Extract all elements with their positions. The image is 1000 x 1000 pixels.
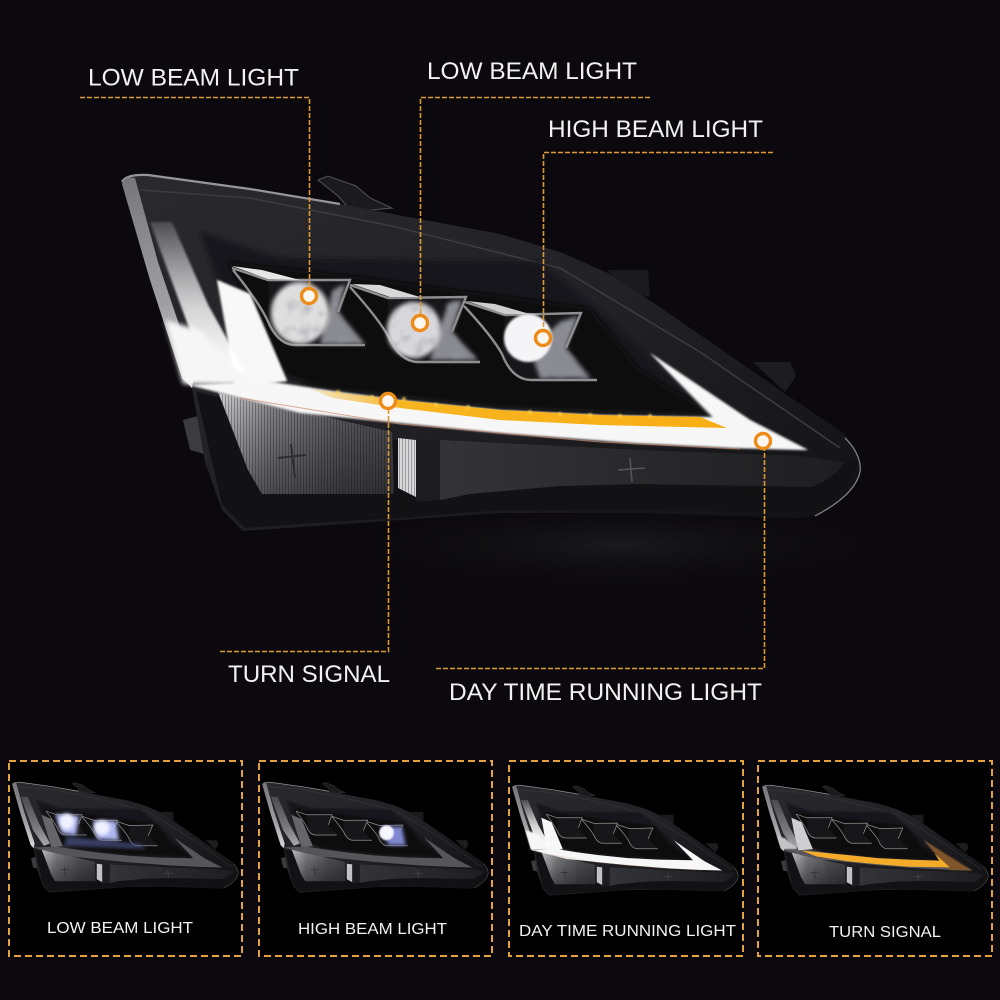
small headlight with low beam on bbox=[12, 782, 238, 893]
label: HIGH BEAM LIGHT bbox=[298, 921, 447, 938]
small headlight with running light on bbox=[512, 785, 738, 896]
small headlight with turn signal on bbox=[762, 785, 988, 896]
label: TURN SIGNAL bbox=[829, 924, 941, 941]
callout: high beam light: HIGH BEAM LIGHT bbox=[548, 116, 763, 143]
panel: turn signal bbox=[758, 761, 992, 956]
lit projector lenses bbox=[232, 266, 590, 378]
callout: high beam light bbox=[536, 116, 773, 346]
label: DAY TIME RUNNING LIGHT bbox=[519, 923, 736, 940]
panel: day time running light bbox=[509, 761, 743, 956]
callout: low beam light, middle projector bbox=[412, 58, 650, 330]
callout: turn signal bbox=[220, 394, 396, 688]
panel: low beam light bbox=[9, 761, 242, 956]
main headlight product illustration bbox=[122, 174, 880, 587]
panel: high beam light bbox=[259, 761, 492, 956]
headlight body bbox=[122, 174, 860, 531]
amber turn signal strip bbox=[310, 389, 727, 428]
label: LOW BEAM LIGHT bbox=[47, 920, 193, 937]
callout: low beam light, left projector bbox=[80, 64, 316, 304]
callout: low beam light, left projector: LOW BEAM LIGHT bbox=[88, 64, 299, 92]
callout: turn signal: TURN SIGNAL bbox=[228, 661, 390, 688]
callout: low beam light, middle projector: LOW BEAM LIGHT bbox=[427, 58, 637, 85]
headlight reflection on floor bbox=[360, 503, 880, 587]
callout: day time running light: DAY TIME RUNNING LIGHT bbox=[449, 679, 762, 706]
callout: day time running light bbox=[436, 434, 770, 706]
white daytime running light strip bbox=[150, 222, 808, 450]
small headlight with high beam on bbox=[262, 782, 488, 893]
